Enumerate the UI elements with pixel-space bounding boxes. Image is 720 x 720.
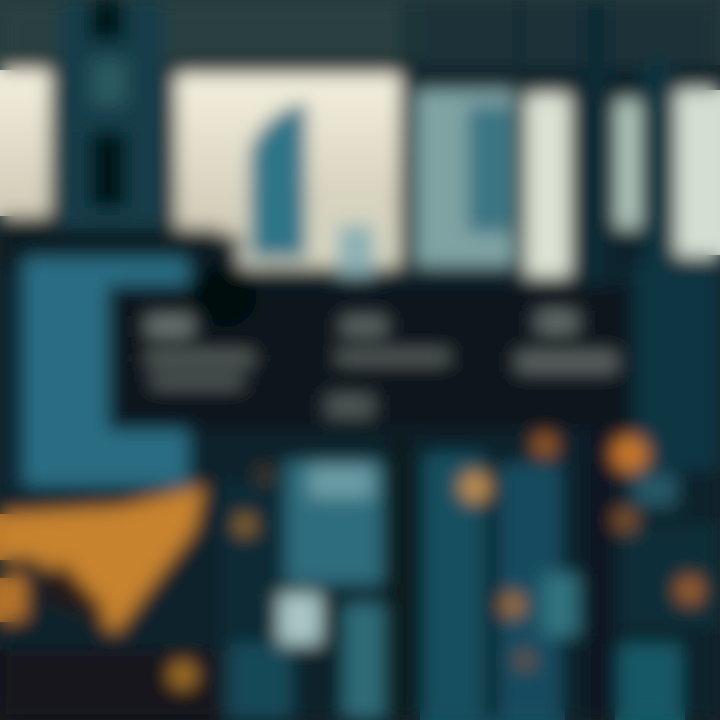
dark pillars — [58, 0, 670, 290]
orange lights — [169, 433, 704, 689]
panel text blocks — [147, 311, 617, 417]
lower floor — [0, 430, 720, 720]
skyline towers — [250, 102, 512, 275]
window panels — [0, 70, 720, 276]
header band — [0, 0, 720, 68]
dark text panel — [108, 263, 633, 430]
lower wall — [0, 228, 720, 490]
orange awning — [0, 486, 204, 634]
